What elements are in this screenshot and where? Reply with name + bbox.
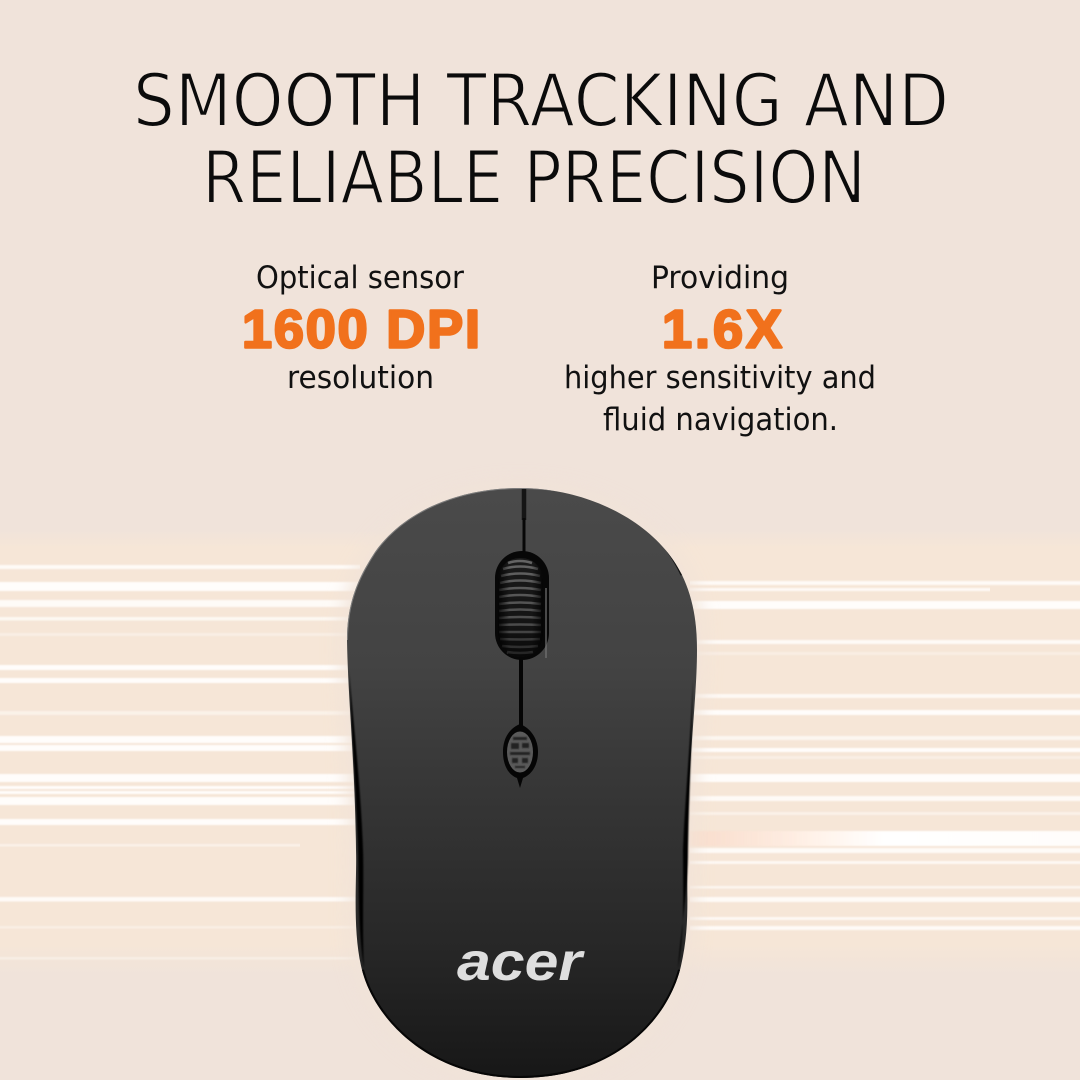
title: RELIABLE PRECISION [202,136,866,221]
stat: 1.6X sensitivity: fluid navigation. [603,402,838,438]
top slit lower part [522,518,526,553]
mouse body [347,488,697,1078]
top slit [522,489,526,520]
stat: 1.6X sensitivity: 1.6X [662,300,782,360]
mouse halo [341,484,702,1080]
stat: 1600 DPI sensor: resolution [287,360,434,396]
title [133,59,949,221]
mouse [347,488,697,1078]
stat: 1600 DPI sensor: 1600 DPI [242,300,480,360]
title: SMOOTH TRACKING AND [133,59,949,144]
stat: 1.6X sensitivity: Providing [651,260,789,296]
left side groove [349,670,364,968]
stat: 1.6X sensitivity: higher sensitivity and [564,360,876,396]
scroll wheel [495,551,549,660]
stat: 1600 DPI sensor: Optical sensor [256,260,464,296]
lower slit [519,658,523,730]
stat: 1.6X sensitivity [564,260,876,438]
stat: 1600 DPI sensor [242,260,480,396]
mouse edge lines [347,488,682,1078]
acer logo: acer [457,932,585,992]
DPI button [503,724,538,788]
right side groove [678,680,693,968]
motion streak band [0,530,1080,975]
